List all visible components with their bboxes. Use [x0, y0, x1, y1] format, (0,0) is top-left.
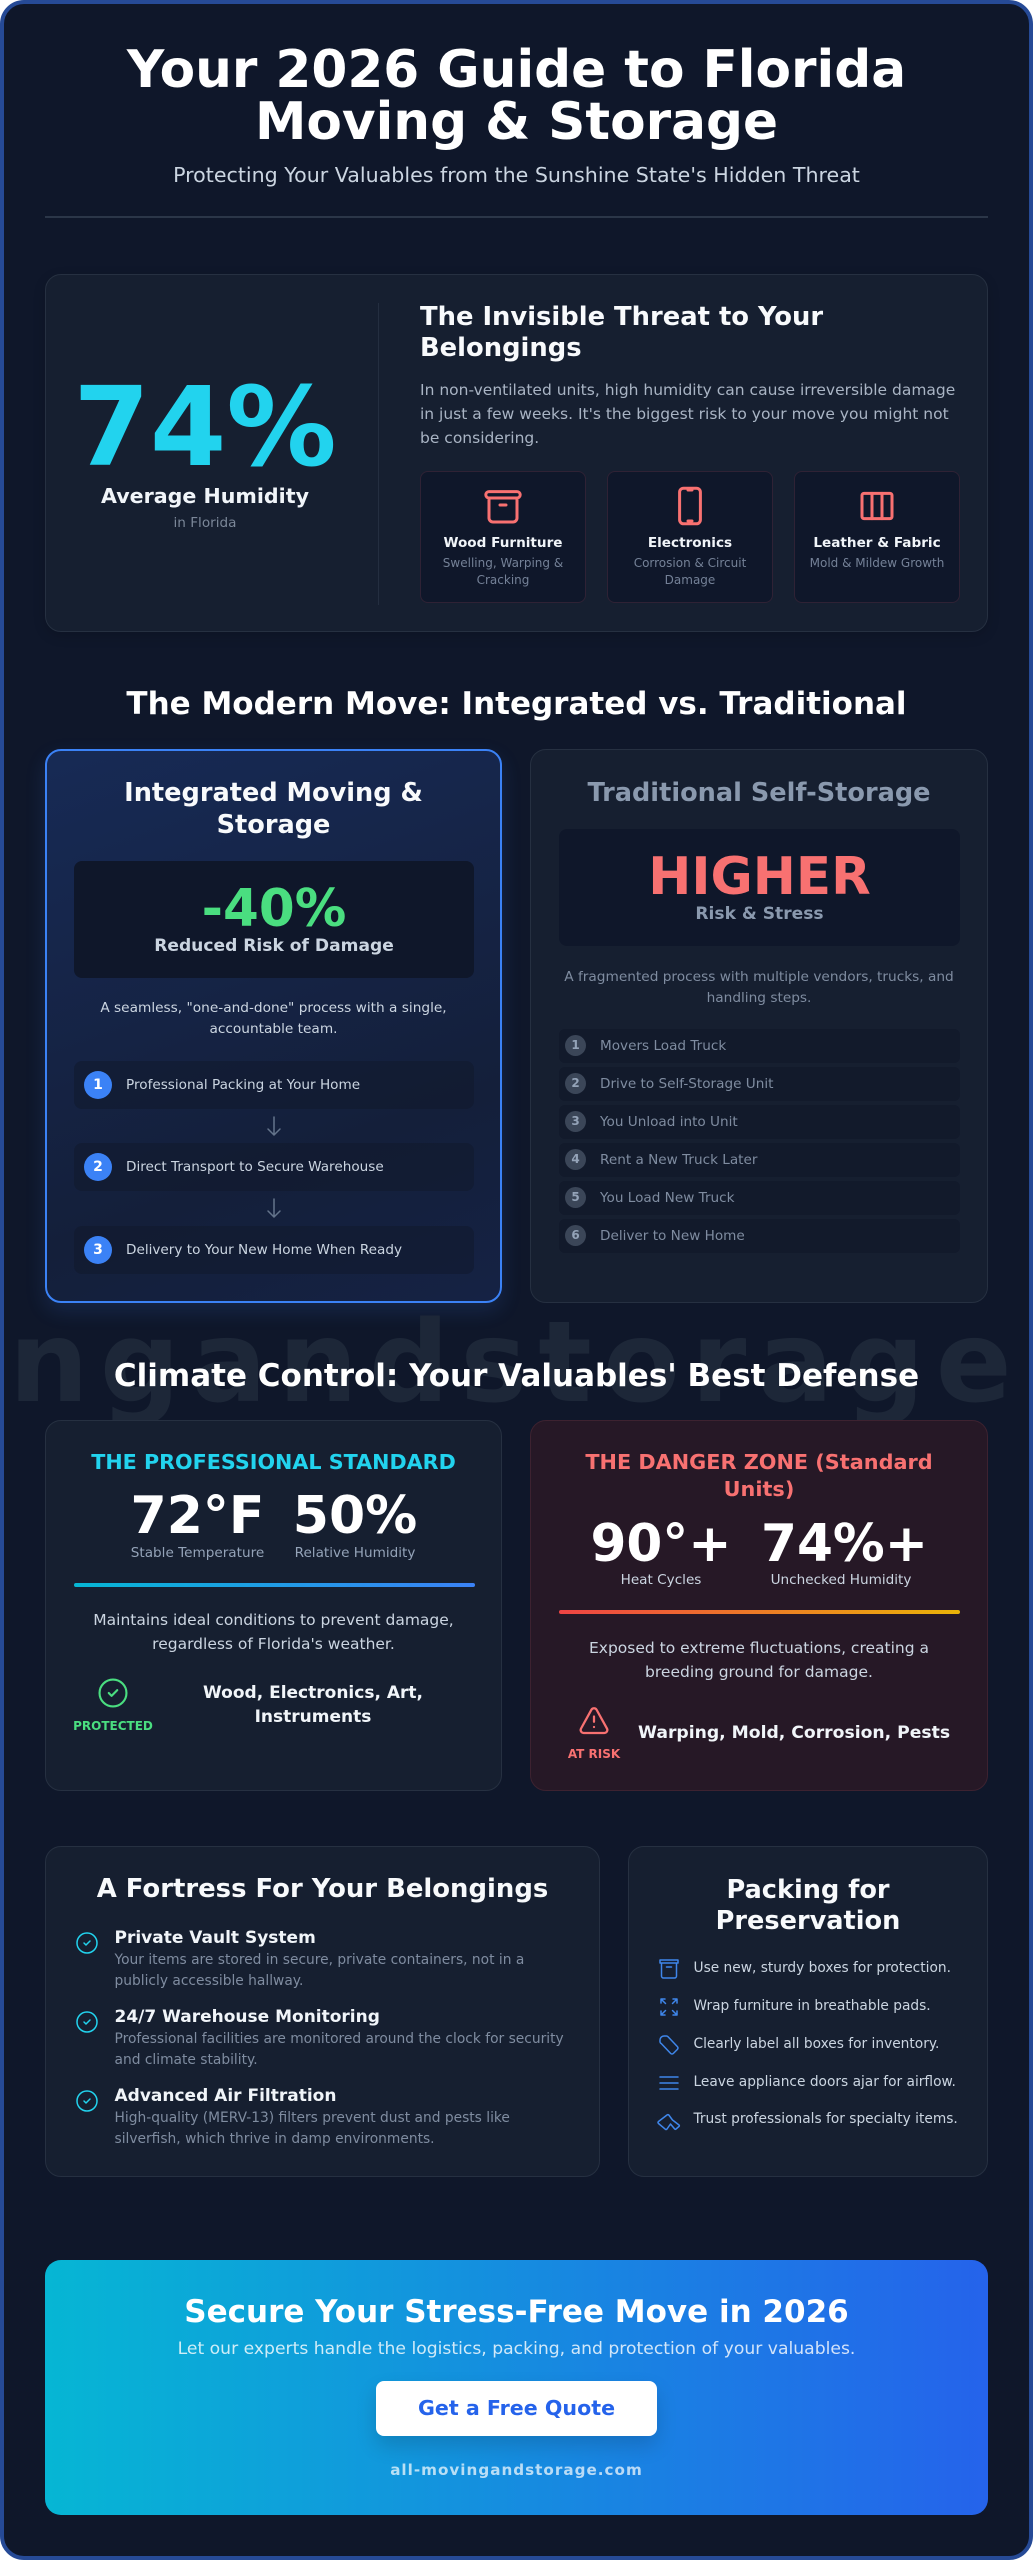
icon: check	[76, 1932, 98, 1954]
step number	[565, 1111, 586, 1132]
stat label: Reduced Risk of Damage	[154, 936, 394, 956]
description: regardless of Florida's weather.	[152, 1635, 395, 1653]
panel title: Units)	[724, 1477, 794, 1501]
step 4	[559, 1143, 960, 1177]
feature text: Professional facilities are monitored around the clock for security	[114, 2031, 564, 2047]
feature text: silverfish, which thrive in damp environments.	[114, 2130, 435, 2146]
stat sublabel: in Florida	[174, 515, 236, 531]
stat: temperature	[131, 1486, 264, 1561]
step number: 5	[571, 1190, 580, 1204]
icon: check	[76, 2011, 98, 2033]
panel title: Packing for	[726, 1875, 890, 1905]
step text: Professional Packing at Your Home	[126, 1077, 360, 1093]
subtitle: Protecting Your Valuables from the Sunshine State's Hidden Threat	[173, 163, 860, 187]
icon: tag	[657, 2033, 681, 2057]
icon: box	[659, 1959, 679, 1979]
stat number: -40%	[202, 879, 346, 939]
cta text: Let our experts handle the logistics, packing, and protection of your valuables.	[178, 2339, 855, 2359]
title: Moving & Storage	[255, 92, 778, 152]
step number: 6	[571, 1228, 580, 1242]
protected items	[203, 1683, 423, 1727]
tip text: Trust professionals for specialty items.	[694, 2111, 958, 2127]
stat: unchecked humidity	[761, 1514, 928, 1588]
step number	[565, 1073, 586, 1094]
at risk status	[568, 1707, 620, 1761]
item damage: Mold & Mildew Growth	[810, 556, 944, 570]
item damage	[634, 556, 746, 587]
item name: Wood Furniture	[443, 535, 563, 551]
item damage: Swelling, Warping &	[443, 556, 563, 570]
stat label: Stable Temperature	[131, 1545, 264, 1561]
feature text	[114, 1952, 524, 1988]
status label: AT RISK	[568, 1747, 620, 1761]
icon: check circle	[98, 1678, 128, 1708]
step number: 2	[571, 1076, 580, 1090]
step 5	[559, 1181, 960, 1215]
stat number: 72°F	[131, 1486, 264, 1546]
step text: You Unload into Unit	[600, 1114, 738, 1130]
step number: 1	[93, 1077, 103, 1093]
icon: columns	[860, 492, 894, 520]
tip text: Clearly label all boxes for inventory.	[694, 2036, 939, 2052]
step number	[84, 1236, 112, 1264]
tip text: Wrap furniture in breathable pads.	[694, 1998, 931, 2014]
title	[126, 40, 906, 152]
panel: fortress	[45, 1846, 600, 2177]
step text: Drive to Self-Storage Unit	[600, 1076, 773, 1092]
stat number: 74%+	[761, 1514, 928, 1574]
step 3	[74, 1226, 474, 1274]
step number	[565, 1035, 586, 1056]
integrated heading: Storage	[217, 810, 330, 840]
stat label: Unchecked Humidity	[771, 1572, 911, 1588]
feature title: 24/7 Warehouse Monitoring	[114, 2007, 380, 2027]
stat number: 74%	[73, 363, 337, 491]
step text: Movers Load Truck	[600, 1038, 726, 1054]
watermark: ngandstorage	[9, 1298, 1023, 1428]
stat box: reduced risk	[74, 861, 474, 978]
icon: warning triangle	[580, 1707, 608, 1734]
stat number: HIGHER	[648, 847, 871, 907]
feature title: Advanced Air Filtration	[114, 2086, 336, 2106]
step number	[84, 1071, 112, 1099]
threat paragraph: in just a few weeks. It's the biggest risk to your move you might not	[420, 405, 949, 423]
big stat: 74% humidity	[73, 363, 337, 531]
feature: monitoring	[76, 2007, 564, 2068]
tip: airflow	[657, 2071, 977, 2095]
step text: Direct Transport to Secure Warehouse	[126, 1159, 384, 1175]
icon: tool	[657, 2111, 681, 2135]
header	[45, 40, 988, 218]
risk card: electronics	[607, 471, 773, 603]
step text: Delivery to Your New Home When Ready	[126, 1242, 402, 1258]
panel: invisible threat	[45, 274, 988, 632]
icon: lines	[657, 2071, 681, 2095]
tip: pads	[660, 1998, 931, 2016]
risk items: Warping, Mold, Corrosion, Pests	[638, 1723, 950, 1743]
icon: expand	[657, 1995, 681, 2019]
feature: filtration	[76, 2086, 510, 2146]
feature title: Private Vault System	[114, 1928, 316, 1948]
step number	[565, 1149, 586, 1170]
panel: integrated moving and storage	[45, 749, 502, 1303]
step text: Rent a New Truck Later	[600, 1152, 757, 1168]
panel title: Preservation	[716, 1906, 900, 1936]
step number	[565, 1225, 586, 1246]
item damage: Damage	[665, 573, 715, 587]
step number: 3	[93, 1242, 103, 1258]
item name: Leather & Fabric	[813, 535, 941, 551]
integrated description: A seamless, "one-and-done" process with a single,	[100, 1000, 447, 1016]
risk card: wood furniture	[420, 471, 586, 603]
stat label: Relative Humidity	[295, 1545, 415, 1561]
cta button: Get a Free Quote	[418, 2396, 615, 2420]
item damage: Corrosion & Circuit	[634, 556, 746, 570]
step text: You Load New Truck	[600, 1190, 735, 1206]
step number: 4	[571, 1152, 580, 1166]
feature text	[114, 2031, 564, 2068]
icon: phone	[678, 486, 702, 526]
gradient bar	[74, 1583, 475, 1587]
stat number: 50%	[293, 1486, 417, 1546]
threat heading: The Invisible Threat to Your	[420, 302, 823, 332]
step number	[565, 1187, 586, 1208]
integrated description: accountable team.	[209, 1020, 338, 1036]
arrow	[267, 1116, 281, 1136]
tip text: Use new, sturdy boxes for protection.	[694, 1960, 951, 1976]
panel: traditional self-storage	[530, 749, 988, 1303]
step 2	[74, 1143, 474, 1191]
description	[93, 1611, 454, 1653]
call to action	[45, 2260, 988, 2515]
section heading: modern move: The Modern Move: Integrated vs. Traditional	[126, 686, 907, 722]
stat box: higher risk	[559, 829, 960, 946]
description: Maintains ideal conditions to prevent damage,	[93, 1611, 454, 1629]
integrated heading	[124, 778, 423, 840]
panel: professional standard	[45, 1420, 502, 1791]
description	[589, 1639, 929, 1681]
tip: labels	[657, 2033, 977, 2057]
stat: humidity	[293, 1486, 417, 1561]
step text: Deliver to New Home	[600, 1228, 745, 1244]
arrow	[267, 1198, 281, 1218]
website url: all-movingandstorage.com	[390, 2461, 643, 2479]
step number	[84, 1153, 112, 1181]
panel title: THE PROFESSIONAL STANDARD	[91, 1450, 456, 1474]
stat label: Heat Cycles	[621, 1572, 701, 1588]
step number: 3	[571, 1114, 580, 1128]
traditional description	[564, 969, 954, 1006]
stat number: 90°+	[590, 1514, 732, 1574]
icon: storage box	[484, 490, 522, 524]
step number: 1	[571, 1038, 580, 1052]
risk card: leather and fabric	[794, 471, 960, 603]
stat label: Risk & Stress	[695, 904, 824, 924]
cta heading: Secure Your Stress-Free Move in 2026	[184, 2294, 849, 2330]
section heading: climate control: Climate Control: Your Valuables' Best Defense	[114, 1358, 919, 1394]
panel title: THE DANGER ZONE (Standard	[585, 1450, 933, 1474]
gradient bar	[559, 1610, 960, 1614]
panel title	[716, 1875, 900, 1936]
item damage	[443, 556, 563, 587]
stat: heat	[590, 1514, 732, 1588]
threat paragraph: In non-ventilated units, high humidity can cause irreversible damage	[420, 381, 955, 399]
icon: check	[76, 2090, 98, 2112]
integrated description	[100, 1000, 447, 1036]
item damage: Cracking	[477, 573, 529, 587]
step number: 2	[93, 1159, 103, 1175]
title: Your 2026 Guide to Florida	[127, 40, 906, 100]
feature text: and climate stability.	[114, 2052, 258, 2068]
panel title	[585, 1450, 933, 1501]
feature: vault	[76, 1928, 524, 1988]
item name: Electronics	[648, 535, 732, 551]
protected items: Instruments	[255, 1707, 371, 1727]
feature text: publicly accessible hallway.	[114, 1972, 303, 1988]
step 2	[559, 1067, 960, 1101]
step 6	[559, 1219, 960, 1253]
step 1	[74, 1061, 474, 1109]
threat heading	[420, 302, 824, 363]
status label: PROTECTED	[73, 1719, 153, 1733]
description: Exposed to extreme fluctuations, creating a	[589, 1639, 929, 1657]
panel: packing	[628, 1846, 988, 2177]
traditional description: A fragmented process with multiple vendors, trucks, and	[564, 969, 954, 985]
traditional description: handling steps.	[707, 990, 811, 1006]
description: breeding ground for damage.	[645, 1663, 873, 1681]
threat heading: Belongings	[420, 333, 582, 363]
cta button	[376, 2381, 657, 2436]
traditional heading: Traditional Self-Storage	[587, 778, 931, 808]
stat label: Average Humidity	[101, 484, 309, 508]
feature text: High-quality (MERV-13) filters prevent dust and pests like	[114, 2110, 510, 2126]
tip text: Leave appliance doors ajar for airflow.	[694, 2074, 956, 2090]
tip: boxes	[659, 1959, 951, 1979]
threat paragraph	[420, 381, 955, 447]
feature text: Your items are stored in secure, private containers, not in a	[114, 1952, 524, 1968]
step 1	[559, 1029, 960, 1063]
protected status	[73, 1678, 153, 1733]
tip: specialty	[657, 2109, 977, 2133]
panel title: A Fortress For Your Belongings	[97, 1874, 548, 1904]
threat paragraph: be considering.	[420, 429, 539, 447]
integrated heading: Integrated Moving &	[124, 778, 423, 808]
protected items: Wood, Electronics, Art,	[203, 1683, 423, 1703]
panel: danger zone	[530, 1420, 988, 1791]
feature text	[114, 2110, 510, 2146]
step 3	[559, 1105, 960, 1139]
